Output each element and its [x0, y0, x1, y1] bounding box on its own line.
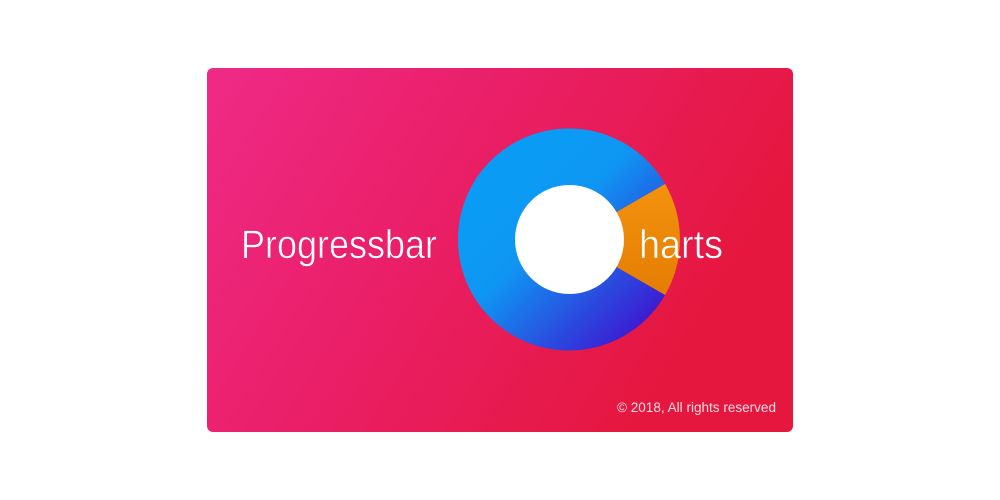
donut segment: orange remainder	[569, 184, 680, 295]
donut segment: blue progress	[458, 129, 665, 350]
donut chart	[458, 129, 680, 350]
copyright note: © 2018, All rights reserved	[617, 400, 776, 415]
title: right part: harts	[639, 223, 723, 267]
title: left part: Progressbar	[241, 223, 437, 267]
panel: gradient card	[207, 68, 793, 432]
donut centre hole	[515, 185, 624, 294]
